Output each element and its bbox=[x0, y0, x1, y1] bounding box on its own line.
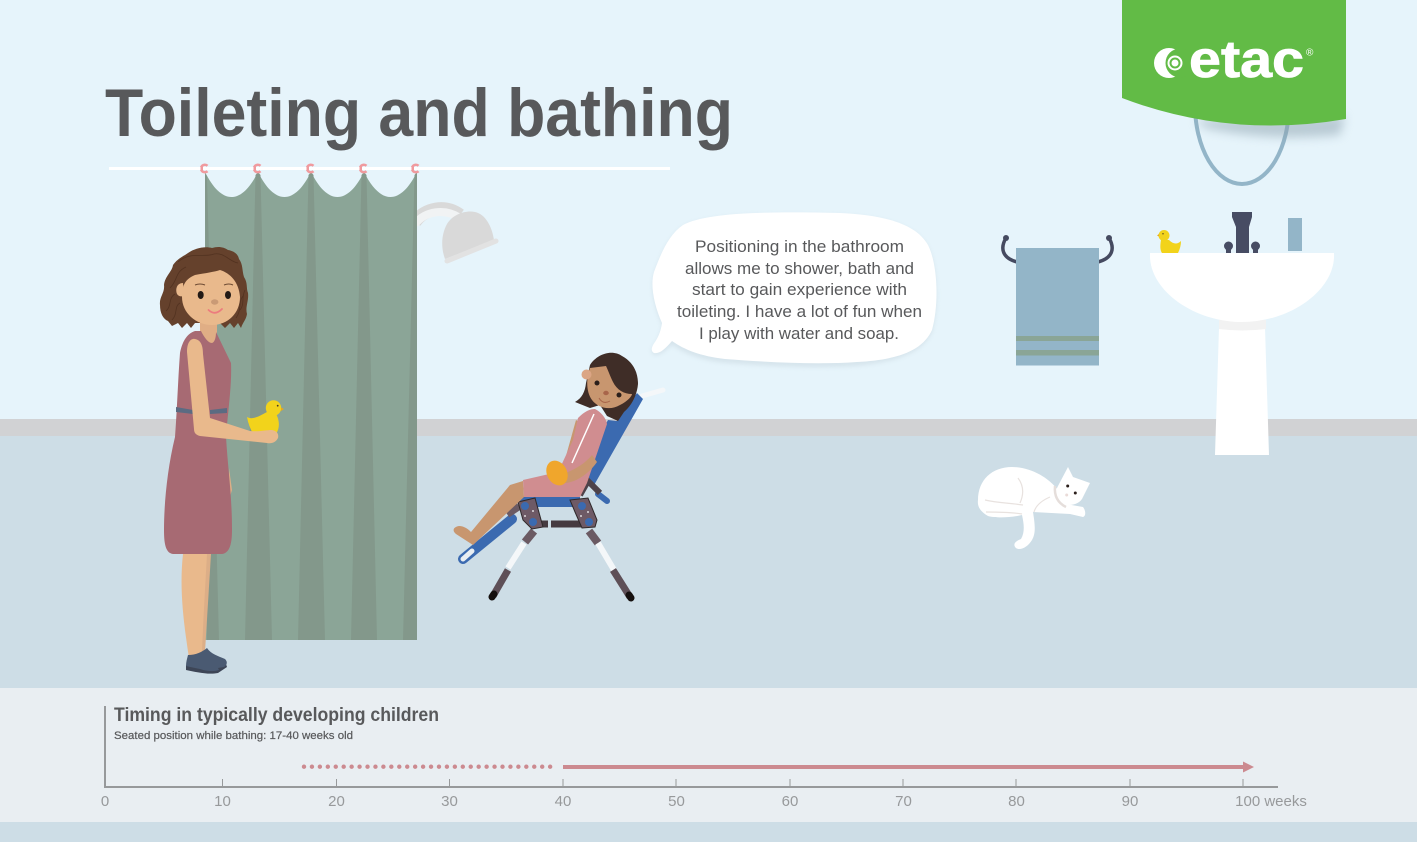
child dress bbox=[523, 409, 607, 497]
badge shadow bbox=[1195, 116, 1345, 137]
pedestal bbox=[1215, 328, 1269, 455]
towel rail bbox=[1003, 235, 1112, 262]
faucet bbox=[1224, 212, 1260, 253]
shoes bbox=[186, 648, 227, 674]
axis labels: 10 bbox=[214, 793, 231, 810]
registered mark: ® bbox=[1306, 48, 1314, 58]
chair legs bbox=[492, 481, 631, 598]
cup bbox=[1288, 218, 1302, 251]
eyes bbox=[198, 291, 204, 299]
axis ticks bbox=[222, 779, 1243, 787]
dress bbox=[164, 331, 232, 554]
speech text: start to gain experience with bbox=[692, 280, 907, 299]
speech text: toileting. I have a lot of fun when bbox=[677, 302, 922, 321]
baseboard bbox=[0, 419, 1417, 436]
axis labels: 30 bbox=[441, 793, 458, 810]
speech text: I play with water and soap. bbox=[699, 324, 899, 343]
shower curtain bbox=[205, 172, 417, 640]
speech text bbox=[677, 237, 922, 343]
shower head bbox=[415, 209, 496, 261]
mirror bbox=[1195, 26, 1289, 184]
axis labels bbox=[101, 793, 1307, 810]
dress belt bbox=[176, 407, 227, 414]
speech text: Positioning in the bathroom bbox=[695, 237, 904, 256]
child upper arm bbox=[566, 420, 582, 458]
shower rod with rings bbox=[109, 165, 670, 172]
small rubber duck bbox=[1157, 230, 1181, 253]
dotted range 17-40 weeks bbox=[304, 765, 558, 769]
ear bbox=[176, 283, 184, 296]
logo badge bbox=[1122, 0, 1346, 137]
timeline heading: Timing in typically developing children bbox=[114, 705, 439, 726]
back leg bbox=[195, 554, 211, 655]
floor background bbox=[0, 436, 1417, 842]
timeline panel background bbox=[0, 688, 1417, 822]
axis labels: 50 bbox=[668, 793, 685, 810]
axis labels: 40 bbox=[555, 793, 571, 810]
title: Toileting and bathing bbox=[105, 75, 733, 151]
axis labels: 80 bbox=[1008, 793, 1025, 810]
axis labels: 70 bbox=[895, 793, 912, 810]
child hair back bbox=[575, 353, 638, 421]
face bbox=[182, 270, 240, 325]
logo symbol bbox=[1154, 48, 1194, 78]
axis labels: 90 bbox=[1122, 793, 1138, 810]
speech text: allows me to shower, bath and bbox=[685, 259, 914, 278]
pedestal neck bbox=[1219, 320, 1266, 330]
axis labels: 100 weeks bbox=[1235, 793, 1307, 810]
axes bbox=[105, 706, 1278, 787]
child leg bbox=[454, 481, 524, 545]
towel bbox=[1016, 248, 1099, 366]
axis labels: 20 bbox=[328, 793, 345, 810]
wall background bbox=[0, 0, 1417, 420]
timeline subheading: Seated position while bathing: 17-40 weeks old bbox=[114, 730, 353, 742]
cat bbox=[978, 467, 1090, 549]
rubber duck bbox=[247, 400, 284, 434]
solid arrow 40-100 weeks bbox=[563, 762, 1254, 772]
arm behind dress bbox=[229, 468, 232, 500]
child arm bbox=[555, 455, 597, 483]
speech bubble bbox=[652, 212, 937, 367]
axis labels: 0 bbox=[101, 793, 109, 810]
child in bath chair bbox=[454, 353, 663, 598]
front leg bbox=[182, 554, 207, 658]
chair seat bbox=[520, 497, 580, 507]
sponge bbox=[542, 457, 572, 489]
hair bbox=[160, 247, 248, 328]
chair back bbox=[581, 393, 643, 487]
woman holding rubber duck bbox=[160, 247, 284, 674]
arm bbox=[187, 339, 278, 443]
timeline chart bbox=[101, 705, 1307, 810]
chair joint plates bbox=[518, 498, 597, 529]
logo wordmark: etac bbox=[1189, 31, 1304, 89]
chair headrest bbox=[642, 390, 663, 396]
nose bbox=[211, 299, 218, 305]
neck bbox=[200, 318, 217, 346]
chair foot section bbox=[463, 519, 512, 559]
child face bbox=[587, 366, 632, 408]
basin bbox=[1150, 253, 1334, 322]
eyebrows bbox=[195, 284, 233, 285]
axis labels: 60 bbox=[782, 793, 798, 810]
sink bbox=[1150, 212, 1334, 455]
smile bbox=[208, 309, 222, 313]
